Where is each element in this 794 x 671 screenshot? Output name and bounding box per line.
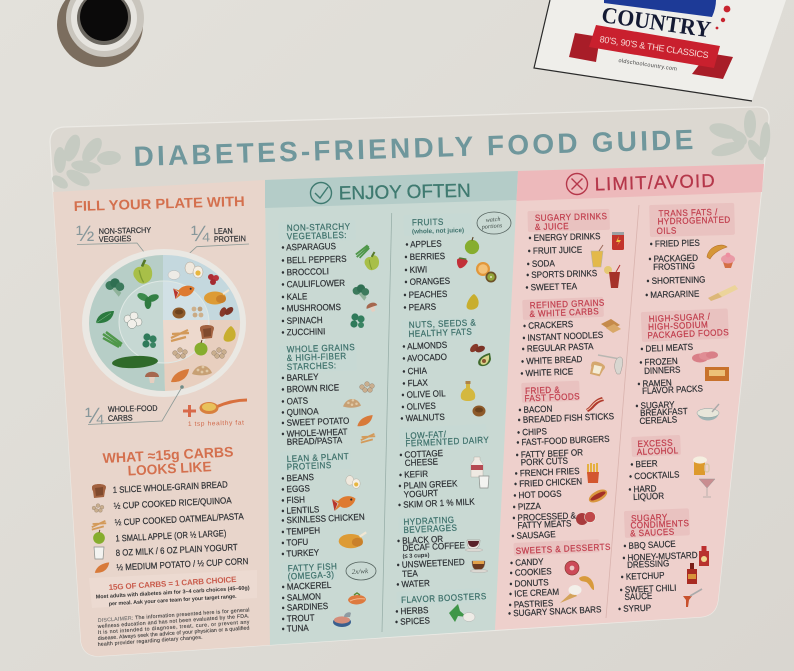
heading: what 15g carbs looks like [102, 443, 234, 478]
section: fried and fast foods: • HOT DOGS [513, 488, 562, 501]
section: hydrating beverages: HYDRATING [403, 514, 455, 527]
section: refined grains: • WHITE RICE [520, 366, 574, 379]
callout: 15g carb choice: Most adults with diabetes aim for 3–4 carb choices (45–60g) [96, 585, 250, 600]
limit avoid label: LIMIT/AVOID [594, 170, 715, 194]
section: fruits: • BERRIES [404, 251, 446, 262]
plate section: lean protein quarter [163, 255, 240, 320]
plate label: one quarter whole-food carbs: ¼ [85, 403, 104, 428]
section: nuts seeds healthy fats: • OLIVES [401, 400, 436, 412]
section: low-fat dairy: • SKIM OR 1 % MILK [398, 496, 475, 510]
section: whole grains: • OATS [281, 395, 308, 407]
section: non-starchy vegetables: NON-STARCHY [287, 221, 351, 233]
section: lean and plant proteins [280, 449, 365, 559]
icons: alcohol [693, 456, 715, 497]
section: lean and plant proteins: • TOFU [281, 536, 308, 548]
carb equivalents text: ½ MEDIUM POTATO / ½ CUP CORN [116, 556, 249, 572]
section: lean and plant proteins: • EGGS [281, 483, 310, 495]
section: fried and fast foods: • BREADED FISH STICKS [518, 411, 614, 425]
icons: drinks [591, 232, 624, 288]
carb equivalents text: 8 OZ MILK / 6 OZ PLAIN YOGURT [116, 542, 238, 558]
section: sugary condiments: CONDIMENTS [630, 518, 690, 531]
section: low-fat dairy: CHEESE [405, 456, 439, 468]
disclaimer: health provider regarding dietary changes. [98, 635, 203, 648]
section: whole grains: • QUINOA [281, 406, 319, 418]
disclaimer: disease. Always seek the advice of your physician or a qualified [98, 625, 250, 642]
section: whole grains: • WHOLE-WHEAT [281, 426, 348, 439]
plus healthy fat spoon [183, 400, 247, 428]
section: nuts seeds healthy fats [400, 317, 476, 424]
section: refined grains: & WHITE CARBS [529, 306, 599, 319]
section: fruits: • ORANGES [404, 275, 450, 287]
section: excess alcohol: • HARD [628, 483, 657, 495]
section: lean and plant proteins: • BEANS [281, 472, 314, 484]
section: high sugar high sodium: DINNERS [644, 364, 681, 376]
icons: trans fats [707, 245, 738, 301]
icon: milk glass [94, 547, 104, 559]
callout: 15g carb choice [89, 570, 257, 608]
section: non-starchy vegetables: • SPINACH [281, 315, 323, 326]
section: high sugar high sodium [635, 308, 729, 426]
section: fruits: • KIWI [404, 264, 427, 275]
section: sugary drinks: & JUICE [535, 221, 569, 232]
section: fatty fish: • SARDINES [282, 600, 329, 613]
section: refined grains [520, 297, 605, 379]
section: sugary condiments: SAUCE [624, 590, 653, 602]
disclaimer: It is not intended to diagnose, treat, cure, or prevent any [98, 619, 250, 636]
section: nuts seeds healthy fats: • ALMONDS [402, 339, 448, 352]
section: whole grains: STARCHES: [287, 360, 337, 372]
section: fruits [403, 213, 472, 313]
section: non-starchy vegetables: • ZUCCHINI [281, 326, 325, 338]
sticker red stars [716, 6, 730, 29]
section: whole grains: BREAD/PASTA [287, 435, 343, 447]
section: whole grains: • BARLEY [281, 371, 319, 383]
section: lean and plant proteins: • FISH [281, 494, 305, 506]
section: sugary condiments: • KETCHUP [621, 570, 665, 582]
section: fruits: • APPLES [405, 238, 442, 250]
section: lean and plant proteins: • TURKEY [281, 547, 320, 559]
section: lean and plant proteins: • TEMPEH [281, 525, 320, 537]
disclaimer [98, 607, 250, 648]
section: nuts seeds healthy fats: • WALNUTS [400, 411, 445, 424]
section: whole grains: WHOLE GRAINS [287, 342, 355, 355]
enjoy often label: ENJOY OFTEN [339, 181, 471, 204]
disclaimer: DISCLAIMER: The information presented here is for general [98, 607, 250, 624]
section: fried and fast foods: • FRIED CHICKEN [514, 476, 582, 489]
note: watch portions: portions [480, 222, 503, 231]
section: refined grains: • WHITE BREAD [521, 354, 583, 367]
section: high sugar high sodium: HIGH-SUGAR / [649, 311, 711, 324]
section: high sugar high sodium: CEREALS [639, 414, 678, 426]
section: fatty fish: • TROUT [282, 612, 315, 624]
section: fried and fast foods: FATTY MEATS [517, 518, 572, 531]
plate label: one quarter lean protein [175, 221, 249, 267]
plate inner ring [119, 281, 209, 363]
panel: fill your plate background [53, 180, 270, 656]
section: sugary drinks: • SODA [527, 258, 555, 269]
section: lean and plant proteins: LEAN & PLANT [287, 451, 350, 464]
section: whole grains: • BROWN RICE [281, 382, 340, 395]
section: hydrating beverages: DECAF COFFEE [402, 540, 465, 553]
section: high sugar high sodium: • RAMEN [637, 377, 672, 389]
section: fatty fish: • TUNA [282, 622, 309, 634]
plate label: one quarter whole-food carbs: CARBS [108, 413, 133, 423]
carb equivalents text: ½ CUP COOKED RICE/QUINOA [114, 495, 232, 511]
section: non-starchy vegetables: • BROCCOLI [281, 266, 329, 278]
section: high sugar high sodium: • DELI MEATS [640, 341, 693, 354]
icons: fruits [456, 237, 496, 310]
section: low-fat dairy: FERMENTED DAIRY [405, 434, 489, 449]
section: excess alcohol: EXCESS [637, 437, 673, 449]
section: low-fat dairy: • KEFIR [399, 468, 428, 480]
icon: rice [92, 504, 104, 512]
section: sugary drinks: SUGARY DRINKS [535, 211, 607, 223]
section: lean and plant proteins: • SKINLESS CHICKEN [281, 511, 365, 526]
section: fruits: • PEARS [403, 301, 436, 313]
plate section: non-starchy veggies half [89, 255, 165, 391]
section: lean and plant proteins: PROTEINS [287, 460, 332, 472]
metal door grommet [57, 0, 144, 67]
note: watch portions [477, 212, 511, 234]
sticker ribbon text: 80'S, 90'S & THE CLASSICS [599, 34, 709, 60]
section: low-fat dairy: LOW-FAT/ [405, 429, 447, 441]
limit header band [516, 164, 764, 201]
section: fried and fast foods: • FAST-FOOD BURGERS [516, 433, 610, 448]
section: refined grains: REFINED GRAINS [530, 297, 605, 311]
plate label: one quarter lean protein: ¼ [191, 221, 210, 246]
section: excess alcohol: ALCOHOL [637, 445, 679, 457]
icons: herbs and garlic [449, 604, 475, 622]
section: sugary condiments [618, 508, 698, 614]
icons: proteins [332, 476, 366, 548]
disclaimer: wellness education and has not been evaluated by the FDA. [98, 613, 250, 630]
section: fried and fast foods: PORK CUTS [521, 455, 568, 468]
section: flavor boosters [395, 588, 487, 627]
section: low-fat dairy: • PLAIN GREEK [398, 478, 458, 491]
icon: pasta [92, 521, 106, 530]
section: high sugar high sodium: • SUGARY [635, 399, 675, 411]
sticker red ribbon [569, 25, 733, 79]
icons: vegetables [350, 243, 381, 328]
plate label: one quarter whole-food carbs: WHOLE-FOOD [108, 403, 158, 414]
section: hydrating beverages: TEA [402, 568, 418, 579]
section: trans fats: • MARGARINE [645, 288, 700, 300]
section: sugary condiments: SUGARY [631, 512, 668, 524]
decorative leaves right [708, 110, 772, 163]
plate label: one half veggies: VEGGIES [99, 234, 131, 244]
section: fried and fast foods [511, 381, 614, 541]
plate label: one half veggies: NON-STARCHY [99, 225, 151, 236]
carb list [92, 479, 249, 573]
icon: x circle [566, 174, 588, 194]
section: lean and plant proteins: • LENTILS [281, 504, 320, 516]
section: whole grains: • SWEET POTATO [281, 415, 350, 428]
section: refined grains: • REGULAR PASTA [522, 341, 594, 354]
icons: beverages [465, 540, 488, 573]
note: 2x per week: 2x/wk [352, 567, 369, 576]
section: sugary drinks: • ENERGY DRINKS [528, 231, 601, 243]
icons: packaged foods [692, 351, 729, 420]
panel: limit avoid background [495, 164, 764, 630]
heading: what 15g carbs looks like: LOOKS LIKE [127, 458, 212, 478]
heading: what 15g carbs looks like: WHAT ≈15g CARBS [102, 443, 234, 466]
section: fatty fish [281, 561, 338, 634]
section: sweets and desserts: • PASTRIES [509, 598, 554, 610]
icons: condiments [683, 546, 709, 607]
section: sugary drinks [525, 209, 610, 293]
section: fruits: (whole, not juice) [412, 227, 464, 236]
section: fatty fish: (OMEGA-3) [288, 569, 335, 582]
section: excess alcohol: • BEER [630, 458, 658, 470]
column header: enjoy often [310, 181, 471, 204]
section: high sugar high sodium: FLAVOR PACKS [642, 383, 703, 396]
panel: enjoy often column two [395, 212, 511, 627]
plus healthy fat spoon: 1 tsp healthy fat [188, 420, 244, 428]
section: sugary condiments: & SAUCES [630, 526, 675, 539]
section: nuts seeds healthy fats: • AVOCADO [402, 351, 447, 364]
plate foods [96, 259, 236, 383]
section: sweets and desserts [508, 539, 611, 619]
title: DIABETES-FRIENDLY FOOD GUIDE [133, 124, 694, 172]
section: fried and fast foods: FAST FOODS [524, 391, 580, 404]
section: sugary condiments: • SYRUP [618, 602, 652, 614]
section: hydrating beverages: • WATER [396, 578, 430, 590]
icons: dairy [471, 457, 489, 488]
icon: sweet potato [95, 562, 109, 573]
section: fruits: • PEACHES [403, 288, 448, 300]
section: trans fats: HYDROGENATED [657, 214, 731, 227]
callout: 15g carb choice: per meal. Ask your care team for your target range. [109, 594, 237, 608]
section: sweets and desserts: • COOKIES [510, 566, 552, 578]
section: trans fats: • PACKAGED [648, 252, 698, 264]
section: sugary drinks: • SPORTS DRINKS [526, 268, 598, 280]
section: low-fat dairy: • COTTAGE [399, 448, 443, 460]
icon: apple [93, 530, 105, 544]
section: fried and fast foods: • CHIPS [517, 426, 547, 438]
plate label: one quarter whole-food carbs [85, 385, 184, 428]
section: nuts seeds healthy fats: • OLIVE OIL [401, 388, 446, 400]
section: whole grains [279, 342, 357, 447]
section: trans fats: OILS [656, 225, 677, 236]
section: flavor boosters: • SPICES [395, 615, 430, 627]
section: trans fats: • SHORTENING [646, 274, 706, 286]
section: hydrating beverages: BEVERAGES [403, 522, 458, 535]
icons: refined grains [588, 319, 623, 378]
sticker url: oldschoolcountry.com [618, 58, 678, 73]
section: low-fat dairy: YOGURT [404, 488, 439, 500]
callout: 15g carb choice: 15G OF CARBS = 1 CARB CHOICE [108, 575, 237, 592]
section: non-starchy vegetables [278, 220, 356, 338]
section: hydrating beverages: • UNSWEETENED [397, 557, 465, 570]
note: 2x per week [346, 562, 376, 580]
section: sugary condiments: • SWEET CHILI [620, 582, 677, 595]
decorative leaves left [50, 132, 122, 191]
icons: grains [343, 382, 375, 443]
section: trans fats: TRANS FATS / [658, 207, 718, 219]
section: fatty fish: • SALMON [282, 591, 321, 603]
panel: enjoy often column one [278, 220, 381, 634]
panel: limit column two [618, 203, 738, 614]
panel: limit column one [508, 209, 624, 619]
plate label: one half veggies: ½ [76, 221, 94, 246]
section: non-starchy vegetables: • CAULIFLOWER [281, 277, 345, 290]
section: nuts seeds healthy fats: HEALTHY FATS [408, 326, 472, 339]
section: nuts seeds healthy fats: • CHIA [402, 365, 427, 377]
section: sugary drinks: • FRUIT JUICE [528, 244, 583, 256]
section: sugary condiments: • HONEY-MUSTARD [622, 549, 698, 563]
note: watch portions: watch [485, 216, 501, 224]
section: nuts seeds healthy fats: NUTS, SEEDS & [409, 317, 476, 330]
section: non-starchy vegetables: • ASPARAGUS [281, 241, 336, 253]
section: fatty fish: • MACKEREL [282, 579, 332, 592]
plate label: one quarter lean protein: LEAN [214, 226, 233, 236]
section: fried and fast foods: • PIZZA [513, 500, 541, 512]
panel: enjoy often background [265, 171, 518, 645]
section: sweets and desserts: • DONUTS [509, 577, 549, 589]
icon: bread slice [92, 484, 106, 498]
plate label: one quarter lean protein: PROTEIN [214, 234, 246, 244]
icons: desserts [560, 561, 594, 603]
section: trans fats: FROSTING [653, 260, 695, 272]
section: low-fat dairy [398, 424, 489, 510]
section: high sugar high sodium: BREAKFAST [640, 406, 689, 418]
section: whole grains: & HIGH-FIBER [287, 351, 347, 363]
icons: fast foods [576, 397, 609, 525]
icons: nuts and fats [461, 340, 491, 416]
section: fried and fast foods: • FATTY BEEF OR [516, 447, 583, 460]
section: fried and fast foods: • FRENCH FRIES [515, 465, 580, 479]
section: high sugar high sodium: • FROZEN [639, 355, 678, 368]
section: high sugar high sodium: PACKAGED FOODS [647, 327, 729, 341]
carb equivalents text: 1 SMALL APPLE (OR ½ LARGE) [115, 528, 227, 544]
icon: check circle [310, 182, 332, 204]
section: flavor boosters: • HERBS [395, 605, 429, 617]
enjoy header band [265, 171, 518, 208]
heading: fill your plate with: FILL YOUR PLATE WITH [74, 193, 245, 214]
section: sweets and desserts: SWEETS & DESSERTS [516, 541, 611, 556]
icons: fatty fish [333, 593, 366, 627]
plate diagram [82, 249, 246, 397]
section: sweets and desserts: • CANDY [510, 556, 544, 568]
section: sugary condiments: • BBQ SAUCE [623, 538, 676, 551]
column header: limit avoid [566, 170, 715, 194]
magnet board [50, 107, 772, 656]
section: fried and fast foods: FRIED & [525, 384, 560, 396]
section: fruits: FRUITS [412, 216, 444, 228]
section: hydrating beverages: (≤ 3 cups) [402, 553, 430, 560]
section: sweets and desserts: • SUGARY SNACK BARS [508, 604, 602, 619]
section: hydrating beverages [396, 514, 465, 590]
plate label: one half veggies [76, 221, 151, 259]
section: refined grains: • INSTANT NOODLES [522, 329, 604, 343]
sticker: Old School Country [534, 0, 786, 101]
section: nuts seeds healthy fats: • FLAX [402, 377, 428, 389]
section: fatty fish: FATTY FISH [288, 561, 338, 574]
section: non-starchy vegetables: • BELL PEPPERS [281, 253, 347, 266]
section: trans fats [645, 203, 735, 300]
section: sugary condiments: DRESSING [627, 558, 670, 570]
section: non-starchy vegetables: • KALE [281, 291, 308, 302]
section: high sugar high sodium: HIGH-SODIUM [648, 319, 708, 332]
section: excess alcohol: LIQUOR [633, 490, 664, 502]
section: trans fats: • FRIED PIES [650, 237, 700, 249]
sticker wordmark: COUNTRY [600, 2, 713, 42]
section: hydrating beverages: • BLACK OR [397, 534, 443, 546]
section: non-starchy vegetables: • MUSHROOMS [281, 302, 341, 314]
carb equivalents text [113, 479, 249, 572]
section: non-starchy vegetables: VEGETABLES: [287, 230, 347, 242]
carb equivalents text: ½ CUP COOKED OATMEAL/PASTA [115, 511, 244, 528]
plate section: whole-food carbs quarter [163, 320, 240, 391]
sticker blue disc [604, 0, 716, 17]
section: excess alcohol: • COCKTAILS [629, 469, 680, 482]
section: excess alcohol [628, 435, 681, 502]
section: fried and fast foods: • SAUSAGE [511, 529, 556, 541]
section: fried and fast foods: • BACON [518, 403, 553, 415]
section: fried and fast foods: • PROCESSED & [512, 510, 576, 523]
carb equivalents text: 1 SLICE WHOLE-GRAIN BREAD [113, 479, 228, 495]
section: sweets and desserts: • ICE CREAM [509, 586, 559, 599]
section: sugary drinks: • SWEET TEA [525, 281, 577, 293]
section: refined grains: • CRACKERS [523, 319, 574, 331]
section: flavor boosters: FLAVOR BOOSTERS [401, 591, 487, 605]
